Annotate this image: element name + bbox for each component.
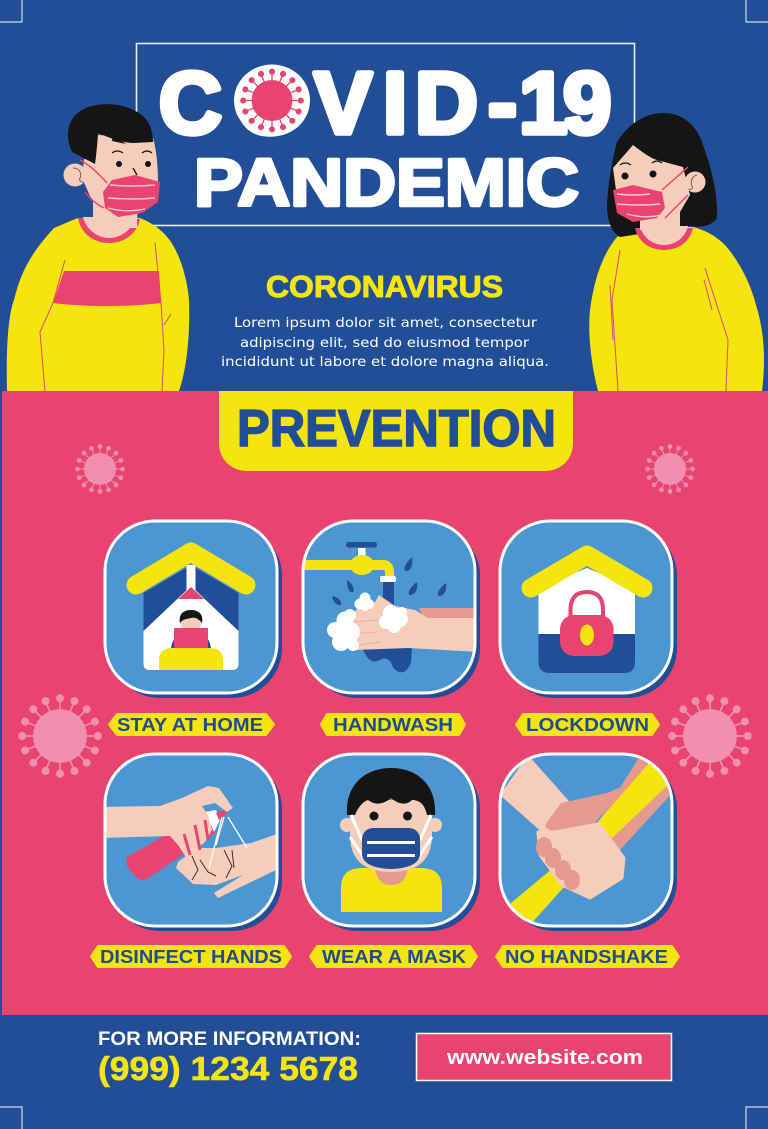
card: no handshake [500,754,677,931]
card: disinfect hands [100,754,282,931]
text block: intro: Lorem ipsum dolor sit amet, consectetur [234,316,538,331]
title: PANDEMIC: PANDEMIC [194,146,579,220]
card: handwash [303,521,480,698]
card: wear a mask [303,754,480,931]
title frame [136,44,634,226]
label: wear a mask: WEAR A MASK [322,947,466,967]
footer: contact text: (999) 1234 5678 [98,1050,358,1087]
text block: intro: incididunt ut labore et dolore magna aliqua. [221,355,549,370]
foam [327,592,408,651]
label: no handshake: NO HANDSHAKE [505,947,668,967]
mask [362,828,420,869]
icon: small virus left [75,444,125,494]
footer: contact text [98,1029,361,1087]
text block: intro: adipiscing elit, sed do eiusmod tempor [240,336,530,351]
footer: website button [416,1034,672,1080]
icon: large virus right [668,694,752,778]
text block: intro [221,316,549,370]
footer: contact text: FOR MORE INFORMATION: [98,1029,361,1050]
label: stay at home: STAY AT HOME [117,715,263,735]
panel: prevention [2,391,768,1015]
footer: website button: www.website.com [446,1047,643,1069]
label: lockdown: LOCKDOWN [526,715,649,735]
banner: prevention [219,391,573,471]
icon: large virus left [18,694,102,778]
label: disinfect hands: DISINFECT HANDS [100,947,282,967]
card: lockdown [500,521,677,698]
card: stay at home [105,521,282,698]
heading: coronavirus: CORONAVIRUS [266,269,503,304]
mask: woman [613,185,665,222]
label: handwash: HANDWASH [333,715,453,735]
illustration: woman in mask [589,113,764,391]
illustration: man in mask [7,104,189,391]
title: COVID-19: COVID-19 [159,55,611,152]
icon: small virus right [645,444,695,494]
mask: man [103,175,160,217]
icon: virus in the letter O [234,64,310,136]
banner: prevention: PREVENTION [237,400,556,458]
